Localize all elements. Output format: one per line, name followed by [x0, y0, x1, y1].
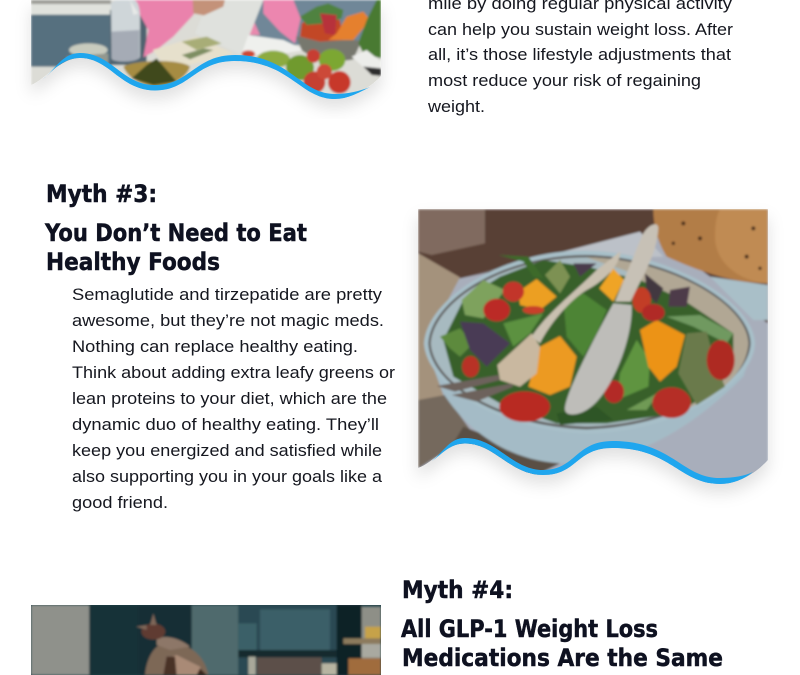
body text: Myth 2 ending	[427, 0, 733, 116]
photo: woman in pink reading at kitchen table with vegetables	[31, 0, 381, 107]
body text: Myth 3: lean proteins to your diet, which are the	[72, 389, 387, 408]
body text: Myth 3: Think about adding extra leafy greens or	[72, 363, 395, 382]
heading: Myth #3: You Don’t Need to Eat	[44, 219, 307, 247]
body text: Myth 3: keep you energized and satisfied while	[72, 441, 382, 460]
body text: Myth 3: Semaglutide and tirzepatide are pretty	[72, 285, 383, 304]
photo: salad bowl with fork and knife	[418, 209, 768, 486]
heading: Myth #3: Myth #3:	[46, 180, 157, 208]
heading: Myth #4: Myth #4:	[402, 576, 513, 604]
body text: Myth 3: good friend.	[72, 493, 168, 512]
body text: Myth 3: awesome, but they’re not magic meds.	[72, 311, 384, 330]
body text: Myth 3	[72, 285, 395, 512]
wave accent	[432, 438, 753, 484]
body text: Myth 3: also supporting you in your goals like a	[72, 467, 383, 486]
heading: Myth #4	[401, 576, 723, 672]
photo: woman with hair bun in dark interior	[31, 605, 381, 675]
heading: Myth #3	[44, 180, 307, 276]
body text: Myth 2 ending: weight.	[427, 97, 485, 116]
body text: Myth 2 ending: most reduce your risk of regaining	[428, 71, 701, 90]
heading: Myth #4: All GLP-1 Weight Loss	[401, 615, 658, 643]
body text: Myth 3: dynamic duo of healthy eating. They’ll	[72, 415, 379, 434]
body text: Myth 3: Nothing can replace healthy eating.	[72, 337, 358, 356]
wave accent	[43, 53, 370, 99]
heading: Myth #4: Medications Are the Same	[402, 644, 723, 672]
body text: Myth 2 ending: can help you sustain weight loss. After	[428, 20, 733, 39]
heading: Myth #3: Healthy Foods	[46, 248, 220, 276]
body text: Myth 2 ending: all, it’s those lifestyle adjustments that	[428, 45, 731, 64]
